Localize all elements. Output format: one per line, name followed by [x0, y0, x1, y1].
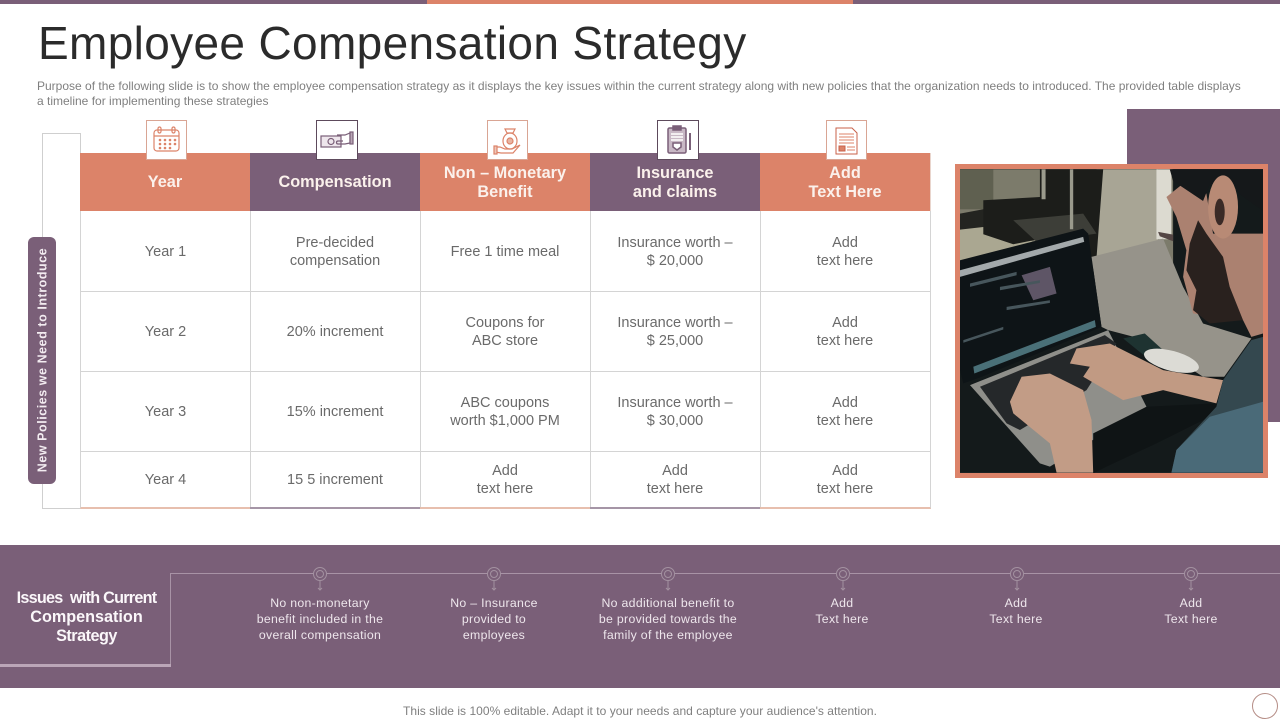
row cells: year 3	[81, 372, 931, 452]
issue 3 text	[599, 596, 737, 642]
connector line	[170, 573, 1280, 666]
row cells: year 1: Free 1 time meal	[451, 244, 559, 260]
row cells: year 3: Insurance worth –	[617, 395, 733, 411]
icon: calendar	[146, 120, 187, 160]
row cells: year 4: 15 5 increment	[287, 472, 383, 488]
header: add text	[760, 153, 931, 211]
row cells: year 4: text here	[477, 481, 533, 497]
row cells: year 4: text here	[817, 481, 873, 497]
row cells: year 2: ABC store	[472, 333, 538, 349]
issue 1 text: No non-monetary	[270, 596, 370, 610]
timeline pins	[313, 567, 1198, 590]
footer note: This slide is 100% editable. Adapt it to your needs and capture your audience's attention.	[403, 704, 877, 718]
issue 2 text: provided to	[462, 612, 526, 626]
header: insurance and claims: Insurance	[637, 164, 713, 182]
purple accent block behind photo	[1127, 109, 1280, 422]
issue 5 text	[989, 596, 1043, 626]
row cells: year 4: Year 4	[145, 472, 186, 488]
row cells: year 3: $ 30,000	[647, 413, 703, 429]
row cells: year 1	[81, 211, 931, 292]
header: insurance and claims: and claims	[633, 182, 717, 200]
issue 2 text: No – Insurance	[450, 596, 538, 610]
issue 2 text	[450, 596, 538, 642]
side bracket	[42, 133, 81, 509]
issue 6 text: Text here	[1164, 612, 1218, 626]
header: insurance and claims	[590, 153, 761, 211]
row cells: year 1: Pre-decided	[296, 235, 374, 251]
top colour strip	[0, 0, 1280, 4]
description text: a timeline for implementing these strategies	[37, 94, 268, 108]
row cells: year 1: $ 20,000	[647, 253, 703, 269]
header: add text: Add	[829, 164, 861, 182]
title: Employee Compensation Strategy	[38, 17, 747, 69]
underline of panel heading	[0, 664, 171, 667]
panel heading: Compensation	[30, 608, 143, 626]
row cells: year 3: Year 3	[145, 404, 186, 420]
vertical label: new policies: New Policies we Need to Introduce	[36, 248, 50, 472]
header: non-monetary benefit	[420, 153, 591, 211]
panel: issues with current strategy	[0, 545, 1280, 688]
vertical label: new policies	[28, 237, 56, 484]
row cells: year 1: text here	[817, 253, 873, 269]
row cells: year 1: Insurance worth –	[617, 235, 733, 251]
row cells: year 4: Add	[662, 463, 688, 479]
row cells: year 2	[81, 292, 931, 372]
row cells: year 4: Add	[832, 463, 858, 479]
header: compensation	[250, 153, 421, 211]
row cells: year 1: compensation	[290, 253, 380, 269]
page number circle	[1252, 693, 1278, 719]
row cells: year 2: Insurance worth –	[617, 315, 733, 331]
row cells: year 2: Add	[832, 315, 858, 331]
panel heading: Issues with Current	[17, 589, 156, 607]
header: add text: Text Here	[808, 182, 882, 200]
issue 3 text: be provided towards the	[599, 612, 737, 626]
row cells: year 3: ABC coupons	[461, 395, 549, 411]
row cells: year 1: Add	[832, 235, 858, 251]
icon: cash in hand	[316, 120, 358, 160]
row cells: year 1: Year 1	[145, 244, 186, 260]
header: non-monetary benefit: Non – Monetary	[444, 164, 566, 182]
issue 2 text: employees	[463, 628, 525, 642]
panel heading: Strategy	[56, 627, 117, 645]
issue 1 text: overall compensation	[259, 628, 381, 642]
row cells: year 2: text here	[817, 333, 873, 349]
row cells: year 4: Add	[492, 463, 518, 479]
issue 4 text	[815, 596, 869, 626]
issue 5 text: Add	[1005, 596, 1027, 610]
row cells: year 4	[80, 452, 931, 509]
issue 6 text: Add	[1180, 596, 1202, 610]
header: compensation: Compensation	[278, 173, 392, 191]
issue 1 text: benefit included in the	[257, 612, 383, 626]
icon: document	[826, 120, 867, 160]
issue 1 text	[257, 596, 383, 642]
description text	[37, 79, 1241, 108]
row cells: year 3: Add	[832, 395, 858, 411]
row cells: year 4: text here	[647, 481, 703, 497]
table	[80, 153, 931, 509]
description text: Purpose of the following slide is to show the employee compensation strategy as it displays the key issues within the current strategy along with new policies that the organization needs to introduced. The provided table displays	[37, 79, 1241, 93]
issue 3 text: No additional benefit to	[602, 596, 734, 610]
row cells: year 2: Coupons for	[466, 315, 544, 331]
header: year: Year	[148, 173, 182, 191]
icon: money bag in hand	[487, 120, 528, 160]
row cells: year 2: 20% increment	[287, 324, 383, 340]
row cells: year 2: $ 25,000	[647, 333, 703, 349]
panel heading	[17, 589, 157, 645]
issue 3 text: family of the employee	[603, 628, 733, 642]
issue 6 text	[1164, 596, 1218, 626]
header: year	[80, 153, 251, 211]
issue 4 text: Add	[831, 596, 853, 610]
photo: man working on laptop	[955, 164, 1268, 478]
header: non-monetary benefit: Benefit	[477, 182, 533, 200]
row cells: year 2: Year 2	[145, 324, 186, 340]
row cells: year 3: 15% increment	[287, 404, 383, 420]
row cells: year 3: worth $1,000 PM	[450, 413, 560, 429]
issue 5 text: Text here	[989, 612, 1043, 626]
row cells: year 3: text here	[817, 413, 873, 429]
icon: clipboard	[657, 120, 699, 160]
issue 4 text: Text here	[815, 612, 869, 626]
